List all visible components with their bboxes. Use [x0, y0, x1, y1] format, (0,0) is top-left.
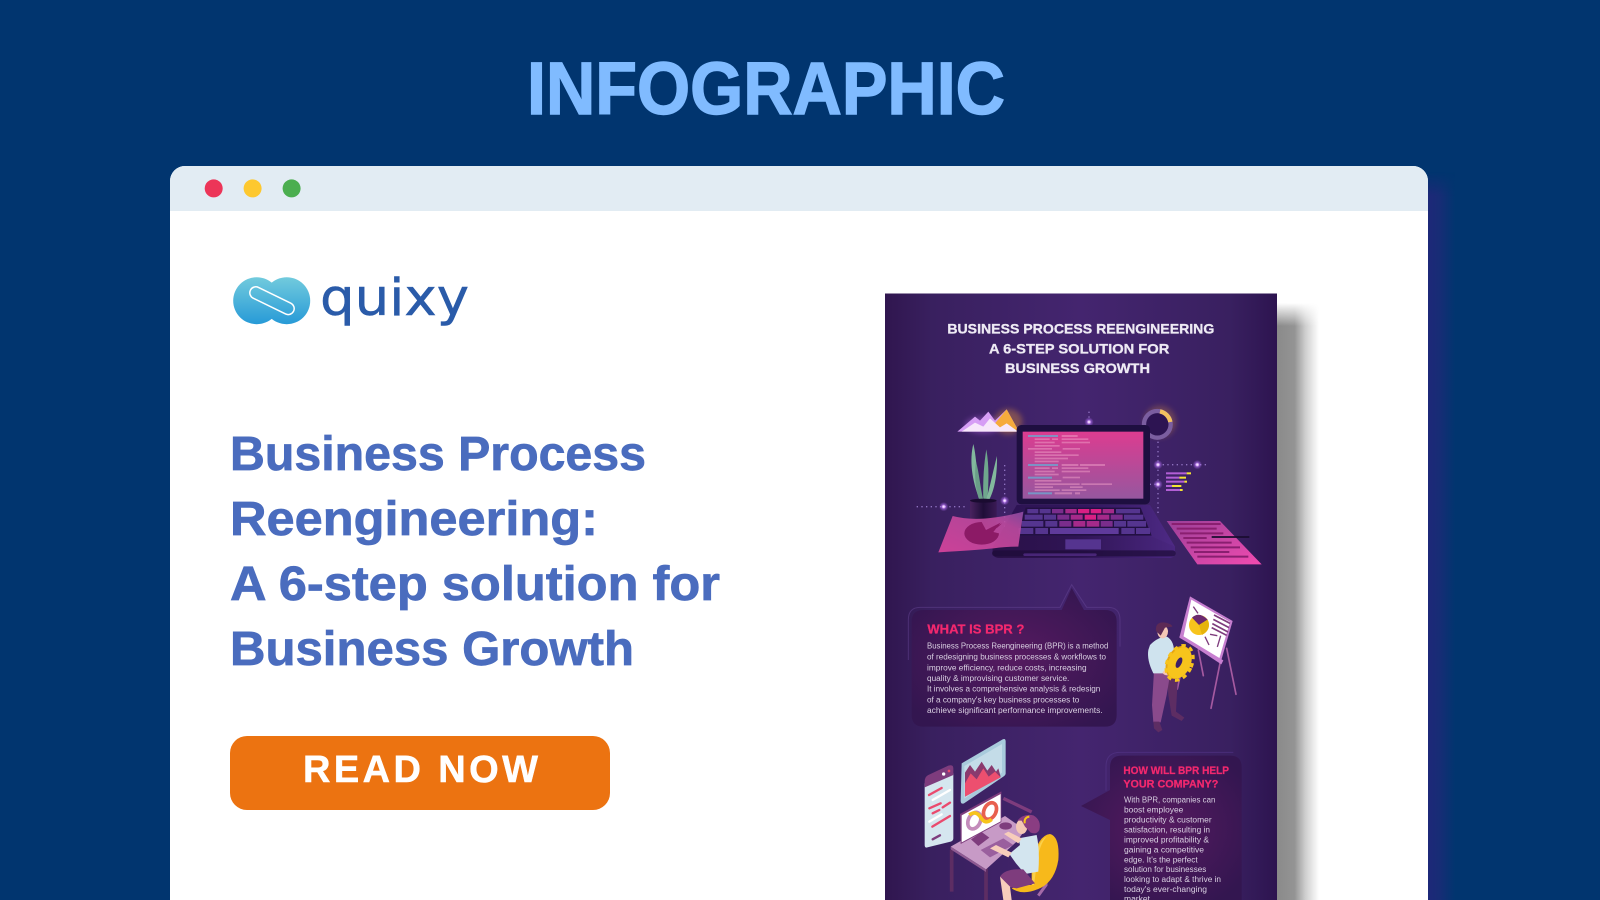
callout panel: [1081, 756, 1242, 900]
infographic canvas: [170, 61, 1449, 900]
mountain chart: [957, 409, 1022, 434]
callout body text: today's ever-changing: [1124, 885, 1207, 894]
poster title: BUSINESS GROWTH: [1005, 360, 1150, 376]
monitor: [960, 791, 1001, 844]
glowing nodes: [939, 417, 1202, 511]
window control: yellow: [244, 179, 262, 197]
chair: [1038, 866, 1046, 896]
headline: A 6-step solution for: [230, 558, 720, 611]
call to action button: READ NOW: [303, 749, 538, 791]
callout body text: It involves a comprehensive analysis & redesign: [927, 685, 1100, 694]
chart screen: [961, 739, 1006, 804]
window title bar: [170, 166, 1428, 211]
headline: [230, 428, 720, 676]
dotted connectors: [917, 412, 1208, 537]
donut chart: [1144, 406, 1176, 438]
callout panel: [912, 588, 1117, 727]
poster top section: [917, 321, 1262, 564]
poster title: [947, 321, 1214, 376]
headline: Business Process: [230, 428, 646, 481]
headline: Reengineering:: [230, 493, 598, 546]
poster title: BUSINESS PROCESS REENGINEERING: [947, 321, 1214, 337]
desk lamp arm: [1003, 798, 1032, 812]
desk: [951, 816, 1025, 900]
callout body text: satisfaction, resulting in: [1124, 825, 1210, 834]
illustration: woman at desk with screens: [925, 739, 1059, 900]
callout body text: [927, 642, 1108, 715]
man: [1148, 622, 1184, 732]
window body: [170, 166, 1428, 900]
callout body text: quality & improvising customer service.: [927, 674, 1069, 683]
app panel: [925, 765, 953, 848]
callout body text: improved profitability &: [1124, 835, 1210, 844]
illustration: laptop workspace: [917, 406, 1262, 564]
callout body text: With BPR, companies can: [1124, 796, 1215, 805]
callout heading: HOW WILL BPR HELP: [1123, 765, 1229, 777]
presentation board: [1179, 596, 1233, 664]
gear: [1160, 641, 1199, 685]
woman: [990, 815, 1059, 900]
callout outline: [908, 585, 1120, 660]
logo icon: [233, 277, 310, 324]
easel legs: [1177, 648, 1236, 708]
callout: how will BPR help: [1081, 752, 1242, 900]
callout body text: Business Process Reengineering (BPR) is a method: [927, 642, 1108, 651]
callout body text: looking to adapt & thrive in: [1124, 875, 1221, 884]
logo wordmark: quixy: [320, 269, 469, 328]
callout body text: edge. It's the perfect: [1124, 855, 1198, 864]
callout heading: [1123, 765, 1229, 791]
callout body text: productivity & customer: [1124, 816, 1212, 825]
body: [1009, 835, 1039, 874]
illustration: man with gear and presentation board: [1148, 596, 1236, 732]
callout body text: gaining a competitive: [1124, 845, 1205, 854]
headline: Business Growth: [230, 623, 634, 676]
plant: [970, 444, 997, 528]
laptop base: [993, 505, 1175, 558]
window control: red: [205, 179, 223, 197]
browser window: [170, 166, 1428, 900]
poster preview: [885, 294, 1277, 900]
head: [1016, 819, 1027, 834]
callout body text: solution for businesses: [1124, 865, 1206, 874]
laptop screen: [1017, 425, 1150, 504]
browser window shadow: [1428, 180, 1449, 900]
window control: green: [283, 179, 301, 197]
callout heading: WHAT IS BPR ?: [927, 621, 1024, 636]
pink paper with pie chart: [938, 512, 1023, 552]
callout body text: boost employee: [1124, 806, 1184, 815]
callout body text: of redesigning business processes & workflows to: [927, 653, 1107, 662]
callout outline: [1106, 752, 1233, 791]
title: INFOGRAPHIC: [527, 47, 1005, 130]
poster background: [885, 294, 1277, 900]
callout body text: achieve significant performance improvements.: [927, 706, 1103, 715]
bar legend: [1166, 472, 1191, 491]
poster lower section: [908, 585, 1242, 900]
callout body text: of a company's key business processes to: [927, 695, 1080, 704]
callout body text: [1124, 796, 1221, 900]
callout heading: YOUR COMPANY?: [1123, 779, 1219, 791]
callout body text: improve efficiency, reduce costs, increasing: [927, 663, 1087, 672]
poster shadow: [1277, 303, 1319, 900]
logo: quixy: [233, 269, 469, 328]
call to action button: [230, 736, 610, 810]
document with lines: [1167, 521, 1262, 564]
poster title: A 6-STEP SOLUTION FOR: [989, 340, 1169, 356]
callout: what is BPR: [908, 585, 1120, 727]
